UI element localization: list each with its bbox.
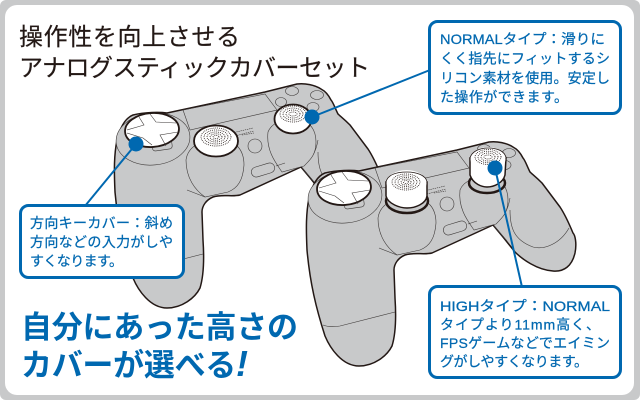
arrow: normal type leader [304,70,430,124]
callout: high type: HIGHタイプ：NORMAL [440,298,610,314]
ps button [248,139,262,153]
callout: high type [430,286,620,378]
callout: normal type [430,22,620,114]
callout: normal type: NORMALタイプ：滑りに [440,31,605,47]
speaker dots [232,128,254,136]
controller: high type [305,142,576,366]
callout: d-pad cover: 方向キーカバー：斜め [30,215,173,231]
title [19,24,370,82]
headline: カバーが選べる! [21,343,248,384]
left analog well [186,140,244,197]
title: アナログスティックカバーセット [19,55,370,82]
title: 操作性を向上させる [19,24,240,51]
arrow: d-pad leader [85,136,144,206]
thumb stick: left normal [194,126,238,156]
callout: d-pad cover: 方向などの入力がしや [30,234,173,250]
headline [21,310,298,384]
arrow: high type leader [488,160,522,287]
tall stick: left high [386,170,428,213]
tall stick: right high [469,147,506,193]
callout: normal type: た操作ができます。 [440,89,568,105]
callout: high type: タイプより11mm高く、 [440,316,600,332]
callout: d-pad cover: すくなります。 [30,253,123,269]
d-pad tab [152,140,173,151]
callout: d-pad cover [20,206,184,278]
callout: normal type: くく指先にフィットするシ [440,50,610,66]
callout: normal type: リコン素材を使用。安定し [440,70,610,86]
grip contour lines [131,140,377,269]
touchpad [183,94,277,130]
callout: high type: FPSゲームなどでエイミン [440,335,610,351]
headline: 自分にあった高さの [21,310,298,345]
d-pad cover [124,111,180,149]
face buttons [276,86,324,112]
controller: normal type [113,84,384,308]
share pill [250,162,276,178]
thumb stick: right normal [274,104,312,134]
right analog well [268,120,316,172]
callout: high type: グがしやすくなります。 [440,354,588,370]
d-pad well [113,109,193,169]
